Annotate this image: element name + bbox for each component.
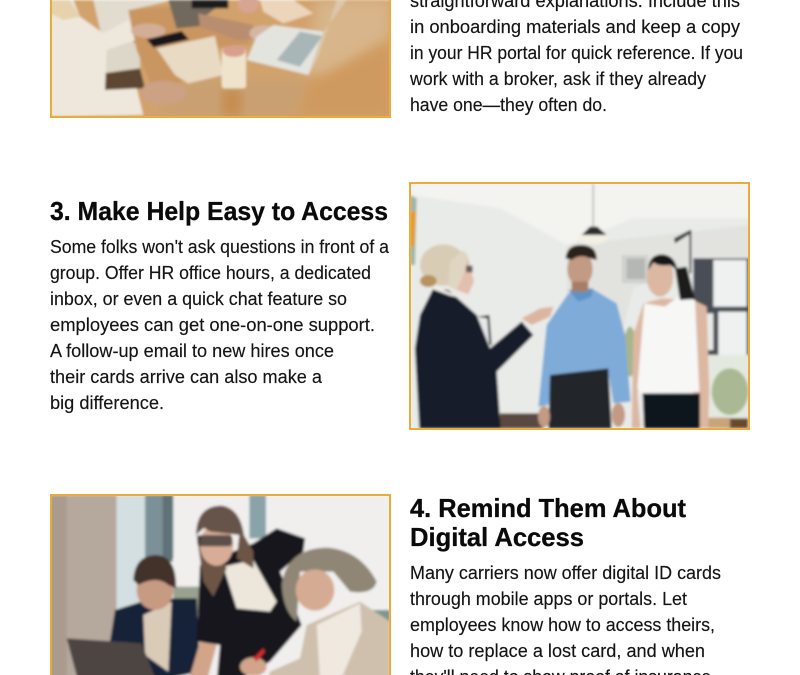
text block: step 2 continuation: work with a broker, ask if they already bbox=[409, 69, 706, 89]
text block: step 4 body: Many carriers now offer digital ID cards bbox=[410, 563, 721, 583]
text block: step 3 body bbox=[50, 237, 390, 413]
text block: step 3 body: A follow-up email to new hires once bbox=[50, 341, 334, 361]
photo: three colleagues around a laptop bbox=[50, 495, 390, 675]
heading: step 4 bbox=[410, 493, 686, 552]
text block: step 4 body: through mobile apps or portals. Let bbox=[410, 589, 687, 609]
heading: step 4: Digital Access bbox=[410, 522, 584, 552]
text block: step 3 body: group. Offer HR office hours, a dedicated bbox=[50, 263, 371, 283]
text block: step 3 body: inbox, or even a quick chat feature so bbox=[50, 289, 347, 309]
photo: HR manager speaking with two employees bbox=[410, 183, 750, 429]
photo: team at table with laptop bbox=[40, 0, 393, 120]
text block: step 4 body: employees know how to access theirs, bbox=[410, 615, 715, 635]
heading: step 3: 3. Make Help Easy to Access bbox=[50, 196, 388, 226]
text block: step 3 body: their cards arrive can also make a bbox=[50, 367, 323, 387]
text block: step 3 body: big difference. bbox=[50, 393, 164, 413]
text block: step 4 body bbox=[410, 563, 721, 675]
text block: step 3 body: employees can get one-on-one support. bbox=[50, 315, 375, 335]
text block: step 2 continuation: in your HR portal for quick reference. If you bbox=[410, 43, 743, 63]
text block: step 2 continuation: have one—they often do. bbox=[410, 95, 607, 115]
text block: step 2 continuation: in onboarding materials and keep a copy bbox=[410, 17, 740, 37]
text block: step 4 body: how to replace a lost card, and when bbox=[410, 641, 705, 661]
text block: step 2 continuation bbox=[409, 0, 743, 115]
heading: step 4: 4. Remind Them About bbox=[410, 493, 686, 523]
text block: step 3 body: Some folks won't ask questions in front of a bbox=[50, 237, 390, 257]
